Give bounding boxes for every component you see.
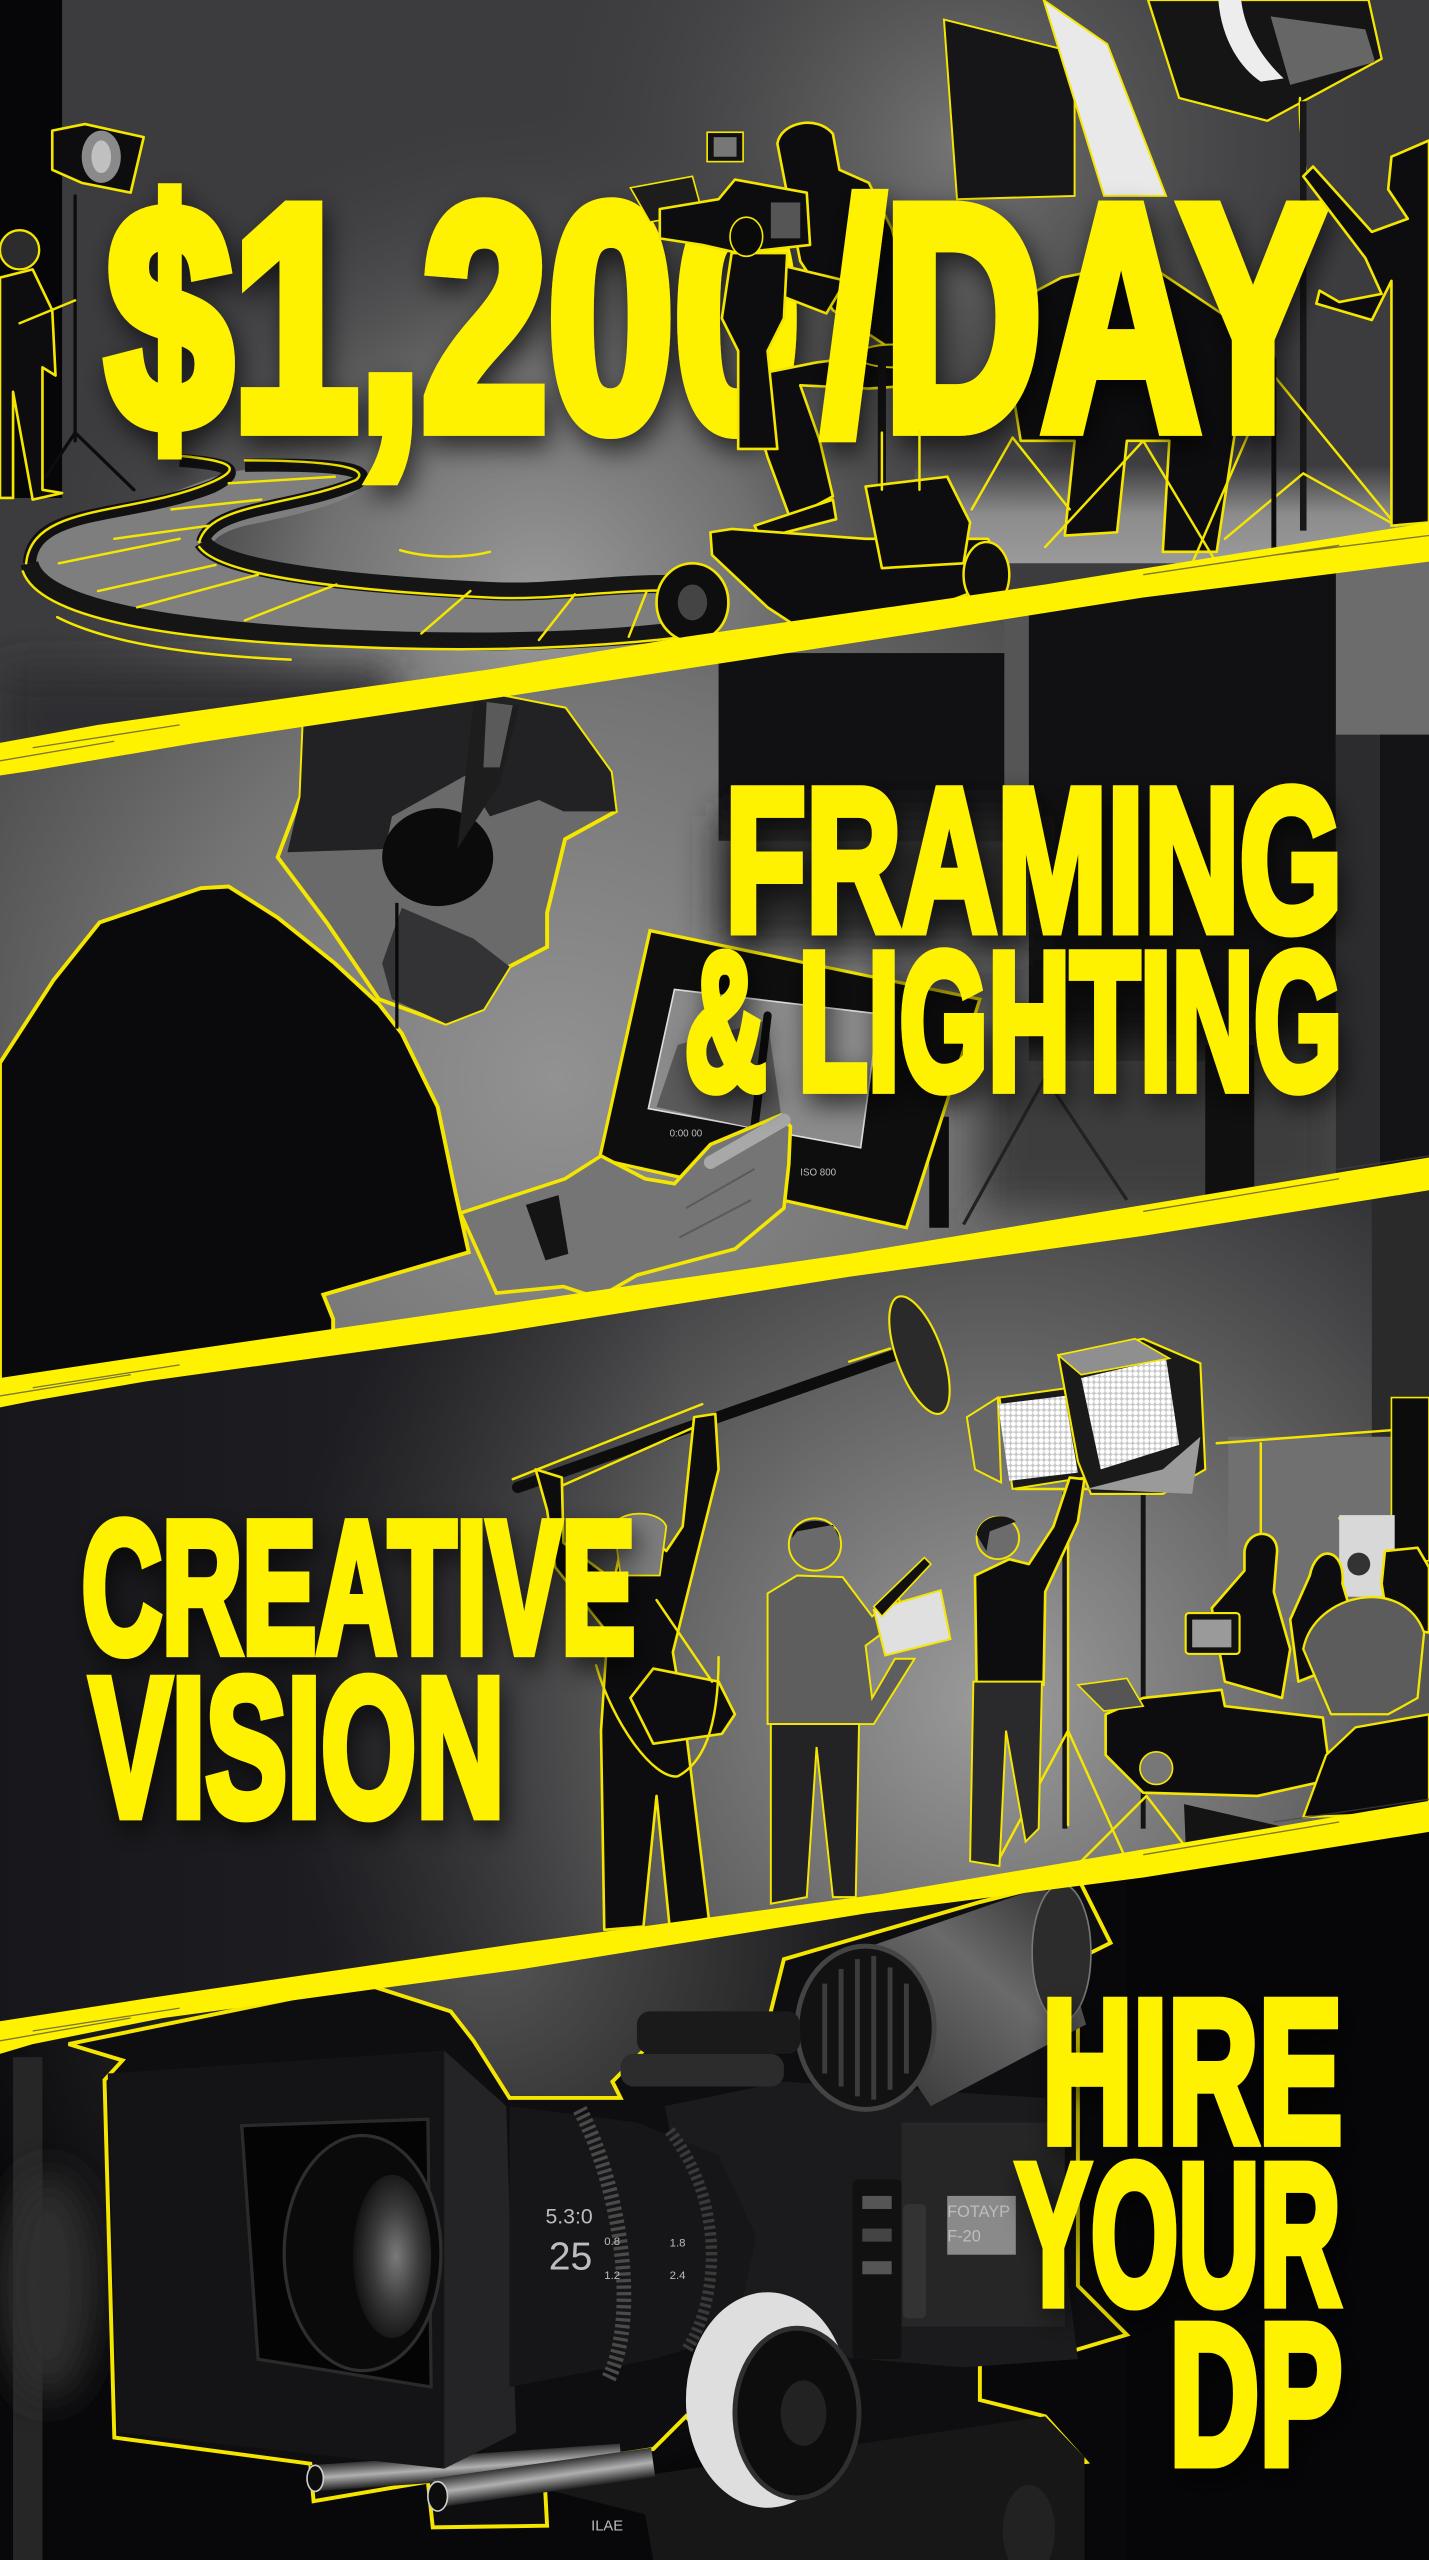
heading: creative vision	[82, 1482, 635, 1858]
icon: dolly cart with wheels	[657, 431, 1009, 645]
heading: framing and lighting	[684, 747, 1342, 1131]
diagonal yellow brush stripe 3	[0, 1799, 1429, 2054]
icon: cine lens barrel	[510, 2106, 756, 2387]
icon: camera body with controls: FOTAYP	[947, 2203, 1010, 2221]
icon: matte box with lens opening	[108, 2051, 516, 2469]
icon: cine lens barrel: 0.8	[604, 2236, 620, 2248]
wall background	[0, 1143, 1429, 2057]
icon: overhead studio lamp	[1148, 0, 1396, 539]
figures: crew members behind	[972, 261, 1396, 563]
icon: on-camera monitor: 0:00 00	[670, 1128, 703, 1139]
icon: camera body with controls	[665, 2082, 1078, 2367]
wall and dark backdrops	[0, 562, 1429, 1329]
icon: cine lens barrel: 1.2	[604, 2270, 620, 2282]
diagonal yellow brush stripe 1	[0, 522, 1429, 776]
figure: man in black t-shirt with headphones	[0, 694, 616, 1388]
heading: hire your dp	[1016, 1958, 1342, 2507]
icon: base plate and rods	[307, 2416, 1084, 2560]
heading: creative vision: VISION	[90, 1637, 505, 1858]
icon: boom pole and blimp microphone	[513, 1289, 962, 1492]
figure: crew member with tablet	[0, 230, 75, 500]
icon: follow focus wheel	[686, 2292, 859, 2508]
icon: cine lens barrel: 2.4	[670, 2270, 686, 2282]
icon: cine lens barrel: 5.3:0	[545, 2206, 593, 2229]
black flag and white diffuser	[944, 0, 1166, 199]
icon: cinema camera with monitor	[1078, 1613, 1331, 1848]
figure: crew member adjusting light	[970, 1478, 1084, 1866]
icon: viewfinder and handle	[621, 1884, 1091, 2109]
heading: day rate left part: $1,200	[106, 141, 800, 496]
panel: DP checking monitor	[0, 522, 1429, 1404]
figure: foreground crew member from behind	[1303, 1597, 1429, 1817]
dark studio background	[0, 1796, 1429, 2560]
studio wall background	[0, 0, 1429, 767]
figure: crew member with clapperboard	[768, 1518, 950, 1904]
dolly track rails	[23, 456, 694, 660]
panel: cinema camera close-up	[0, 1796, 1429, 2560]
icon: cine lens barrel: 1.8	[670, 2238, 685, 2250]
icon: camera body with controls: F-20	[947, 2228, 981, 2246]
figure: camera operator on dolly seat	[753, 121, 893, 532]
icon: fresnel light on stand	[46, 124, 144, 490]
figure: grip raising lamp stand	[1303, 140, 1429, 526]
heading: creative vision: CREATIVE	[82, 1482, 635, 1692]
figure: boom operator with sound bag	[536, 1414, 735, 1930]
icon: on-camera monitor	[599, 931, 980, 1228]
panel: studio dolly shot	[0, 0, 1429, 767]
figures: background crew group	[1212, 1534, 1429, 1698]
icon: cine lens barrel: 25	[549, 2235, 592, 2278]
diagonal yellow brush stripe 2	[0, 1156, 1429, 1407]
icon: cinema camera on tripod head	[630, 132, 810, 449]
panel: film crew on set	[0, 1143, 1429, 2057]
icon: on-camera monitor: ISO 800	[800, 1168, 837, 1179]
icon: camera silhouette outline	[69, 1878, 1127, 2527]
icon: base plate and rods: ILAE	[591, 2519, 623, 2535]
figure: forearm and hand	[461, 1115, 790, 1298]
icon: LED panel lights on stands	[967, 1339, 1205, 1864]
